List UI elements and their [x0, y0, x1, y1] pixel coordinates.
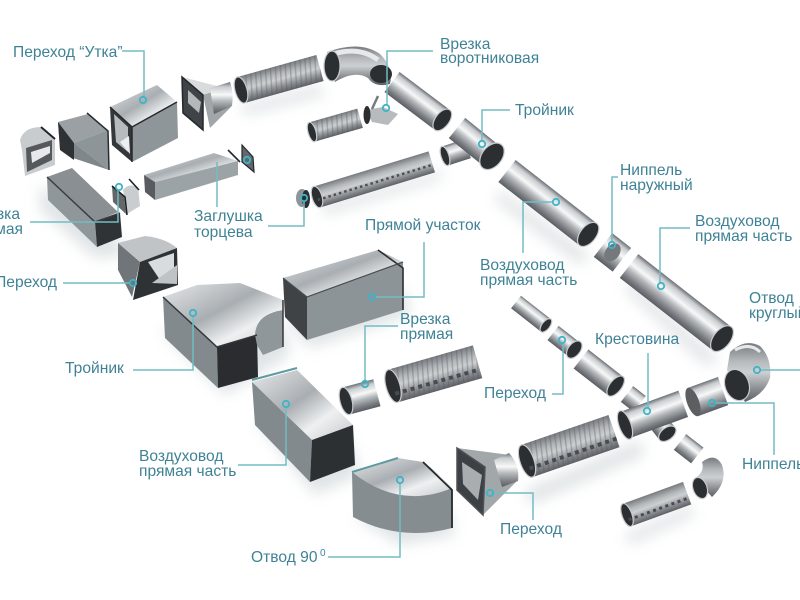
shiny pipe right [620, 254, 738, 356]
small pipe upper [511, 296, 554, 334]
label: Воздуховод right: прямая часть [695, 228, 792, 245]
label: Воздуховод middle: прямая часть [480, 272, 577, 289]
label: Ниппель right [709, 400, 800, 473]
horizontal duct [144, 150, 240, 200]
label: Переход bottom [487, 490, 562, 538]
label: Врезка прямая: прямая [400, 326, 453, 343]
big spiral mid [382, 345, 482, 404]
label: Воздуховод middle: Воздуховод [480, 257, 564, 274]
label: Переход middle: Переход [484, 385, 546, 402]
rect elbow far left [20, 127, 55, 176]
label: Заглушка торцева: торцева [194, 224, 253, 241]
label: Воздуховод middle [480, 199, 577, 289]
small nipple [674, 434, 703, 463]
label: Ниппель наружный [609, 162, 693, 248]
round tee [438, 116, 509, 174]
label: Тройник round: Тройник [515, 102, 574, 119]
transition far left [58, 113, 109, 170]
label: Крестовина: Крестовина [595, 331, 679, 348]
funnel bottom [457, 448, 518, 515]
rect tee [163, 283, 283, 388]
label: Воздуховод right [658, 213, 792, 289]
label: Воздуховод left [139, 401, 289, 480]
straight section [283, 250, 403, 340]
label: Ниппель наружный: наружный [620, 177, 693, 194]
label: Отвод 90 [251, 477, 403, 566]
small elbow [112, 179, 140, 215]
shiny pipe top [384, 72, 455, 134]
label: Врезка воротниковая: Врезка [440, 36, 491, 53]
round elbow top [324, 46, 392, 85]
small bend [690, 458, 724, 501]
label: Переход Утка [13, 44, 146, 103]
label: Отвод 90: Отвод 90 [251, 549, 318, 566]
label: Переход left [0, 274, 136, 291]
spiral pipe top [232, 55, 324, 105]
label: Переход middle [484, 337, 565, 402]
duct parts: round [232, 46, 770, 528]
label: Воздуховод left: прямая часть [139, 463, 236, 480]
label: Заглушка торцева: Заглушка [194, 208, 263, 225]
label: Крестовина [595, 331, 679, 414]
label: Воздуховод left: Воздуховод [139, 448, 223, 465]
label: Отвод круглый: Отвод [749, 290, 794, 307]
outer nipple [594, 233, 631, 272]
big rect duct [252, 368, 355, 482]
label: Прямой участок: Прямой участок [365, 217, 481, 234]
long rectangular duct left [47, 168, 122, 247]
label: Отвод круглый [749, 290, 800, 373]
nipple right [682, 377, 728, 418]
collar tap [364, 96, 398, 125]
end cap [242, 145, 254, 172]
perforated pipe bottom [618, 482, 691, 528]
label: Отвод 90: 0 [320, 548, 326, 559]
soft shadows [40, 85, 720, 545]
pipe middle small [574, 350, 628, 399]
label: Врезка прямая [362, 311, 453, 387]
small pipe [305, 109, 363, 143]
label: Врезка прямая: Врезка [400, 311, 451, 328]
label: Переход Утка: Переход “Утка” [13, 44, 123, 61]
label: Ниппель наружный: Ниппель [620, 162, 682, 179]
label: Тройник rectangular [65, 310, 196, 377]
cross [614, 390, 688, 445]
label: Переход bottom: Переход [500, 521, 562, 538]
shiny pipe middle [498, 160, 603, 250]
round bend [720, 343, 770, 404]
label: Прямой участок [365, 217, 481, 300]
reducer [547, 325, 585, 361]
90 degree bend [352, 458, 452, 533]
label: Врезка воротниковая: воротниковая [440, 50, 539, 67]
label: Воздуховод right: Воздуховод [695, 213, 779, 230]
label: Тройник rectangular: Тройник [65, 360, 124, 377]
label: Врезка прямая left [0, 184, 122, 238]
cap round [296, 189, 310, 208]
box transition [118, 236, 178, 300]
nipple bottom [337, 379, 381, 416]
label: Заглушка торцева [194, 157, 307, 241]
duct parts: rectangular [20, 77, 518, 533]
duck transition [110, 85, 178, 162]
label: Тройник round [479, 102, 574, 147]
label: Врезка воротниковая [383, 36, 539, 111]
top nipple [621, 386, 646, 412]
perforated pipe [309, 151, 435, 209]
spiral pipe large [515, 415, 620, 479]
funnel top [182, 77, 233, 130]
